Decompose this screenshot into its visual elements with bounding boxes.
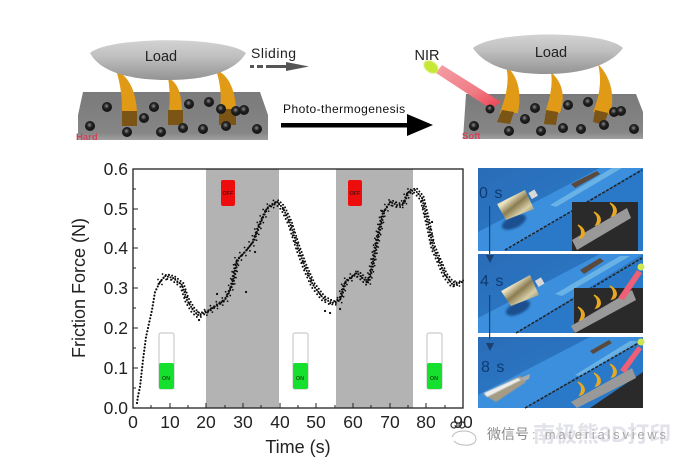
substrate	[78, 92, 268, 140]
x axis labels	[128, 412, 473, 432]
x axis labels: 50	[306, 412, 326, 432]
y axis title: Friction Force (N)	[69, 218, 89, 358]
photo: 0 s	[478, 168, 643, 251]
time arrow 1	[486, 206, 494, 263]
switch: on 1: ON	[162, 376, 170, 382]
watermark: wechat icon	[451, 422, 476, 445]
watermark: text: 微信号	[487, 426, 529, 442]
switch: on 3	[427, 333, 442, 389]
plot frame	[133, 169, 463, 408]
y axis labels: 0.2	[104, 318, 128, 338]
label: Load: Load	[145, 49, 177, 65]
y axis labels	[104, 159, 128, 418]
y axis labels: 0.1	[104, 358, 128, 378]
x axis title: Time (s)	[265, 437, 331, 457]
label: NIR: NIR	[415, 48, 439, 64]
y axis labels: 0.6	[104, 159, 128, 179]
y axis labels: 0.3	[104, 278, 128, 298]
y axis labels: 0.4	[104, 238, 128, 258]
arrow: sliding	[250, 62, 309, 71]
x axis labels: 90	[453, 412, 473, 432]
axis ticks	[133, 189, 445, 408]
y axis labels: 0.5	[104, 199, 128, 219]
x axis labels: 60	[343, 412, 363, 432]
pillars	[500, 66, 520, 113]
particles	[85, 97, 262, 137]
x axis labels: 80	[416, 412, 436, 432]
photo panels	[478, 168, 644, 408]
y axis labels: 0.0	[104, 398, 128, 418]
time arrow 2	[486, 295, 494, 351]
chart: friction force vs time	[69, 159, 473, 457]
switch: off 1	[221, 180, 235, 206]
label: Hard: Hard	[76, 132, 98, 143]
label: Soft: Soft	[462, 131, 481, 142]
switch: off 2	[348, 180, 362, 206]
x axis labels: 0	[128, 412, 138, 432]
switch: on 2: ON	[296, 376, 304, 382]
x axis labels: 40	[270, 412, 290, 432]
switch: off 1: OFF	[222, 191, 234, 197]
switch: on 1	[159, 333, 174, 389]
photo: 4 s	[478, 254, 644, 333]
label: 4 s: 4 s	[480, 273, 504, 290]
label: Load: Load	[535, 45, 567, 61]
label: Sliding: Sliding	[251, 45, 297, 61]
switch: on 3: ON	[430, 376, 438, 382]
data points	[137, 188, 464, 403]
pillar tips	[122, 109, 236, 126]
photo: 8 s	[478, 337, 644, 408]
x axis labels: 20	[196, 412, 216, 432]
pillars	[116, 70, 236, 112]
particles	[469, 97, 639, 136]
switch: on 2	[293, 333, 308, 389]
watermark: text: 南极熊3D打印	[533, 422, 671, 447]
x axis labels: 10	[160, 412, 180, 432]
schematic: hard state	[78, 40, 268, 140]
NIR tip	[421, 58, 441, 76]
switch: off 2: OFF	[350, 191, 361, 197]
off band 2	[336, 169, 413, 408]
arrow: photo-thermogenesis	[281, 114, 433, 136]
x axis labels: 30	[233, 412, 253, 432]
off band 1	[206, 169, 279, 408]
NIR beam	[436, 65, 501, 109]
load lens	[473, 34, 623, 74]
x axis labels: 70	[380, 412, 400, 432]
label: 0 s: 0 s	[479, 185, 503, 202]
load lens	[90, 40, 246, 80]
label: Photo-thermogenesis: Photo-thermogenesis	[283, 102, 406, 116]
label: 8 s: 8 s	[481, 359, 505, 376]
watermark: text: : materialsviews	[532, 427, 666, 442]
pillar tips	[497, 110, 608, 125]
schematic: soft state	[421, 34, 643, 139]
substrate	[463, 94, 643, 139]
